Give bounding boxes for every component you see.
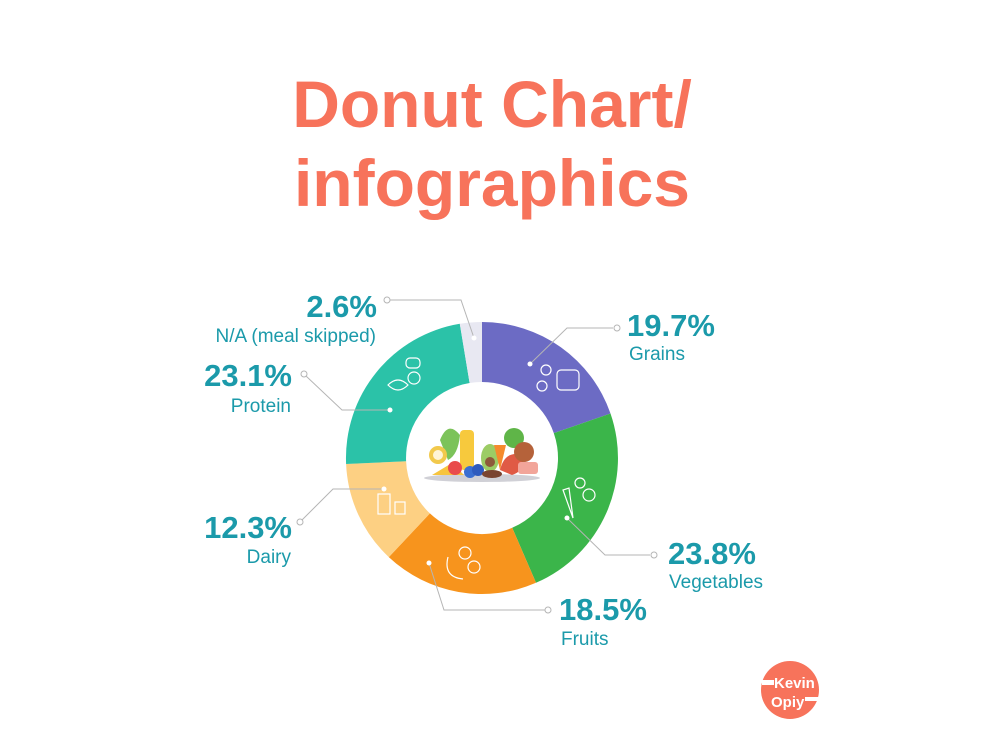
icon: protein xyxy=(388,380,408,390)
logo: Opiy xyxy=(771,694,805,711)
label: dairy xyxy=(204,510,292,568)
segment: fruits xyxy=(389,513,536,594)
label: fruits: Fruits xyxy=(561,629,608,650)
title: infographics xyxy=(294,146,690,220)
label: protein: 23.1% xyxy=(204,358,292,393)
labels xyxy=(204,289,763,650)
segment: protein xyxy=(346,324,470,464)
icon: fruits xyxy=(459,547,471,559)
segment: vegetables xyxy=(512,414,618,583)
label: vegetables: 23.8% xyxy=(668,536,756,571)
label: fruits xyxy=(559,592,647,650)
label: vegetables xyxy=(668,536,763,593)
donut chart xyxy=(346,322,618,594)
label: n/a xyxy=(215,289,377,347)
label: dairy: 12.3% xyxy=(204,510,292,545)
logo: Kevin xyxy=(774,675,815,692)
icon: dairy xyxy=(378,494,390,514)
leader lines xyxy=(302,300,650,610)
icon: vegetables xyxy=(563,488,573,518)
label: grains xyxy=(627,308,715,365)
segment: n/a xyxy=(460,322,482,383)
segment: grains xyxy=(482,322,610,433)
label: protein xyxy=(204,358,292,417)
label: dairy: Dairy xyxy=(247,547,291,568)
label: protein: Protein xyxy=(231,396,291,417)
label: n/a: N/A (meal skipped) xyxy=(215,326,376,347)
label: grains: Grains xyxy=(629,344,685,365)
logo xyxy=(761,661,821,719)
segment: dairy xyxy=(346,461,430,557)
center illustration: food plate xyxy=(424,428,540,482)
label: fruits: 18.5% xyxy=(559,592,647,627)
label: n/a: 2.6% xyxy=(306,289,377,324)
icons in segments xyxy=(378,358,595,579)
title: Donut Chart/ xyxy=(292,67,692,141)
label: grains: 19.7% xyxy=(627,308,715,343)
label: vegetables: Vegetables xyxy=(669,572,763,593)
icon: bread xyxy=(557,370,579,390)
title xyxy=(292,67,692,220)
